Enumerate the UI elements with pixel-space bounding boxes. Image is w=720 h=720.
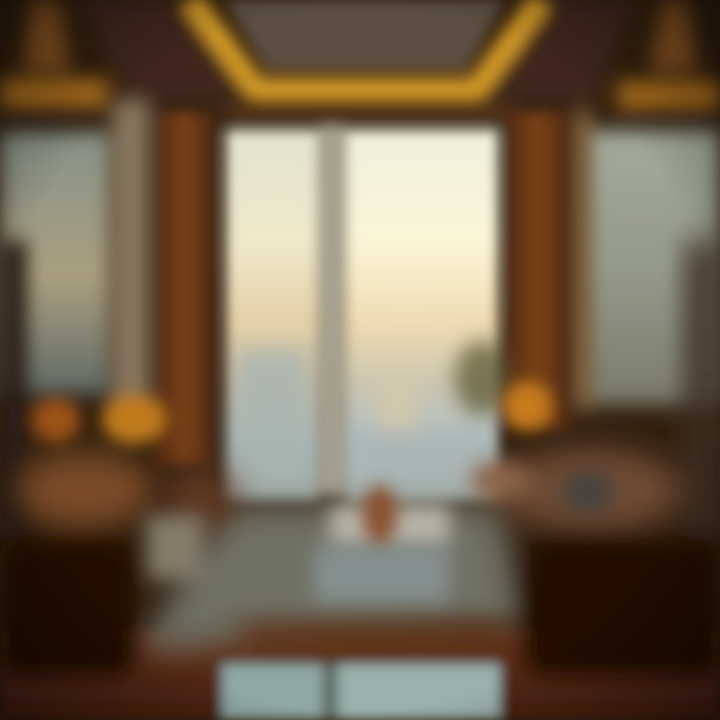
window left pane (226, 130, 318, 500)
floor (0, 630, 720, 720)
left column (156, 112, 216, 464)
left sofa arm (164, 466, 236, 530)
left pale seat (146, 515, 204, 580)
window mullion (319, 125, 345, 495)
table body (314, 546, 450, 602)
right column (506, 112, 572, 430)
distant skyline (238, 350, 490, 490)
left sofa body (0, 540, 135, 675)
rug (140, 505, 525, 650)
floor window reflection (222, 664, 500, 720)
right curtain (574, 110, 592, 410)
right hanging lamp (618, 0, 720, 110)
right sofa body (525, 540, 720, 675)
right sofa cushions (498, 448, 682, 532)
central window (226, 125, 498, 500)
ceiling (80, 0, 640, 122)
lower ceiling beam (225, 104, 515, 122)
window right pane (346, 130, 498, 500)
right side window (585, 130, 720, 405)
right dark edge (685, 240, 720, 540)
coffee table (314, 484, 450, 602)
left sofa (0, 394, 236, 675)
gold cove light (190, 0, 542, 90)
vase (362, 484, 398, 544)
left sofa cushions (17, 452, 153, 528)
plant (454, 340, 510, 416)
table top pale (330, 505, 450, 545)
right grey pillow (562, 472, 614, 512)
rug warm edge (240, 622, 510, 656)
left curtain (112, 100, 150, 410)
right sofa (470, 382, 720, 675)
ceiling side panels (80, 0, 640, 105)
right side table (470, 460, 530, 500)
left lamp glow large (102, 394, 166, 444)
left lamp glow small (32, 398, 80, 442)
left hanging lamp (0, 0, 108, 108)
left side window (0, 132, 112, 394)
right lamp glow (502, 382, 552, 430)
left dark edge (0, 240, 28, 540)
ceiling centre recess (225, 0, 505, 70)
